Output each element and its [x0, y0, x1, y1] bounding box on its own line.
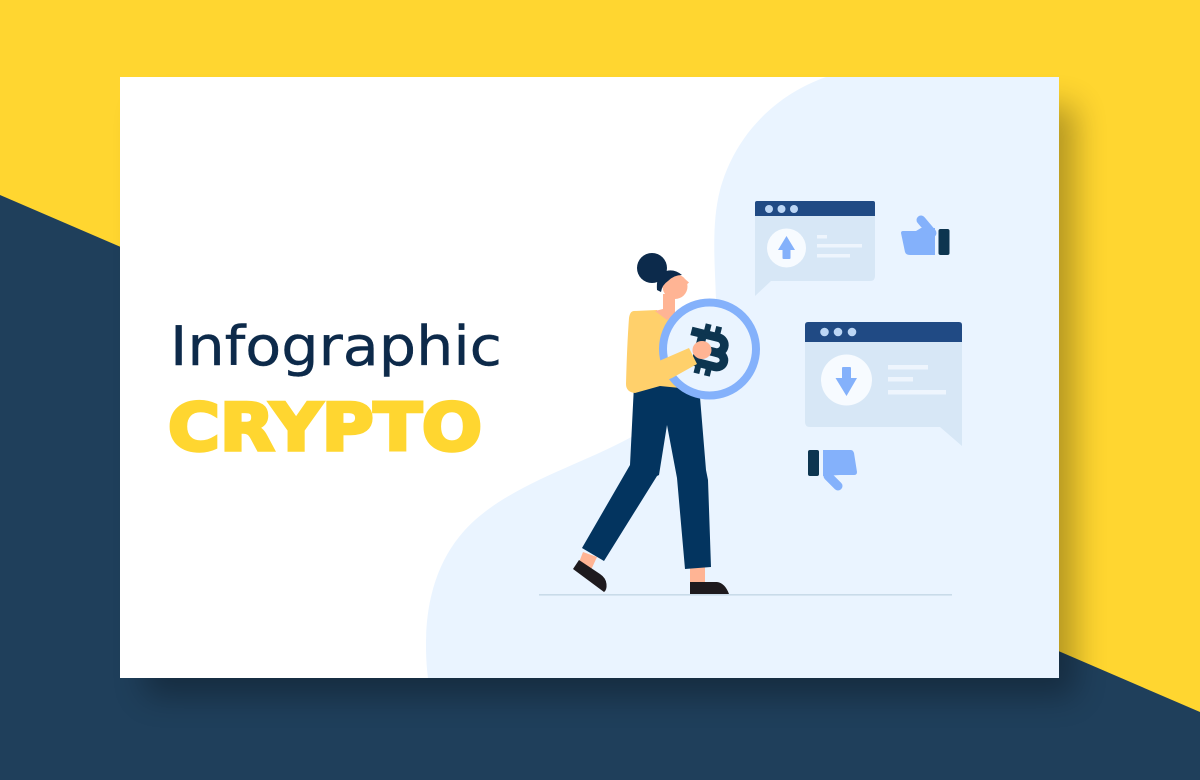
window dots — [765, 205, 773, 213]
front ankle skin — [690, 567, 705, 583]
nose — [685, 279, 689, 286]
background: navy diagonal band — [0, 195, 1200, 780]
ground line — [539, 594, 952, 596]
hair bun — [637, 253, 667, 283]
back shoe — [573, 560, 607, 592]
icon circle — [767, 228, 806, 268]
down arrow — [836, 367, 857, 396]
back foot skin — [578, 552, 597, 570]
title bar — [805, 322, 962, 342]
icon circle — [821, 354, 872, 406]
hand — [692, 341, 712, 359]
speech window: down — [805, 322, 962, 446]
coin — [663, 302, 756, 396]
title: Infographic: Infographic — [170, 315, 502, 378]
icon: thumbs up — [901, 220, 950, 255]
neck — [655, 294, 675, 320]
speech window: up — [755, 201, 875, 296]
illustration: woman holding bitcoin coin — [573, 253, 756, 594]
window dots — [820, 328, 829, 336]
icon: thumbs down — [808, 450, 857, 486]
title: CRYPTO: CRYPTO — [168, 391, 482, 466]
text lines — [817, 235, 827, 238]
sweater body — [626, 310, 700, 393]
card shadow — [145, 106, 1075, 696]
forearm sleeve — [649, 348, 697, 387]
title bar — [755, 201, 875, 216]
text lines — [888, 365, 928, 370]
panel: pale blue blob — [426, 77, 1059, 678]
bubble body — [755, 207, 875, 296]
head — [662, 274, 688, 299]
hair — [657, 270, 682, 292]
up arrow — [778, 236, 795, 259]
panel: white card — [120, 77, 1059, 678]
icon: bitcoin symbol — [682, 320, 732, 379]
front shoe — [690, 582, 729, 594]
coin ring — [663, 302, 756, 396]
trousers — [582, 385, 711, 569]
bubble body — [805, 330, 962, 446]
